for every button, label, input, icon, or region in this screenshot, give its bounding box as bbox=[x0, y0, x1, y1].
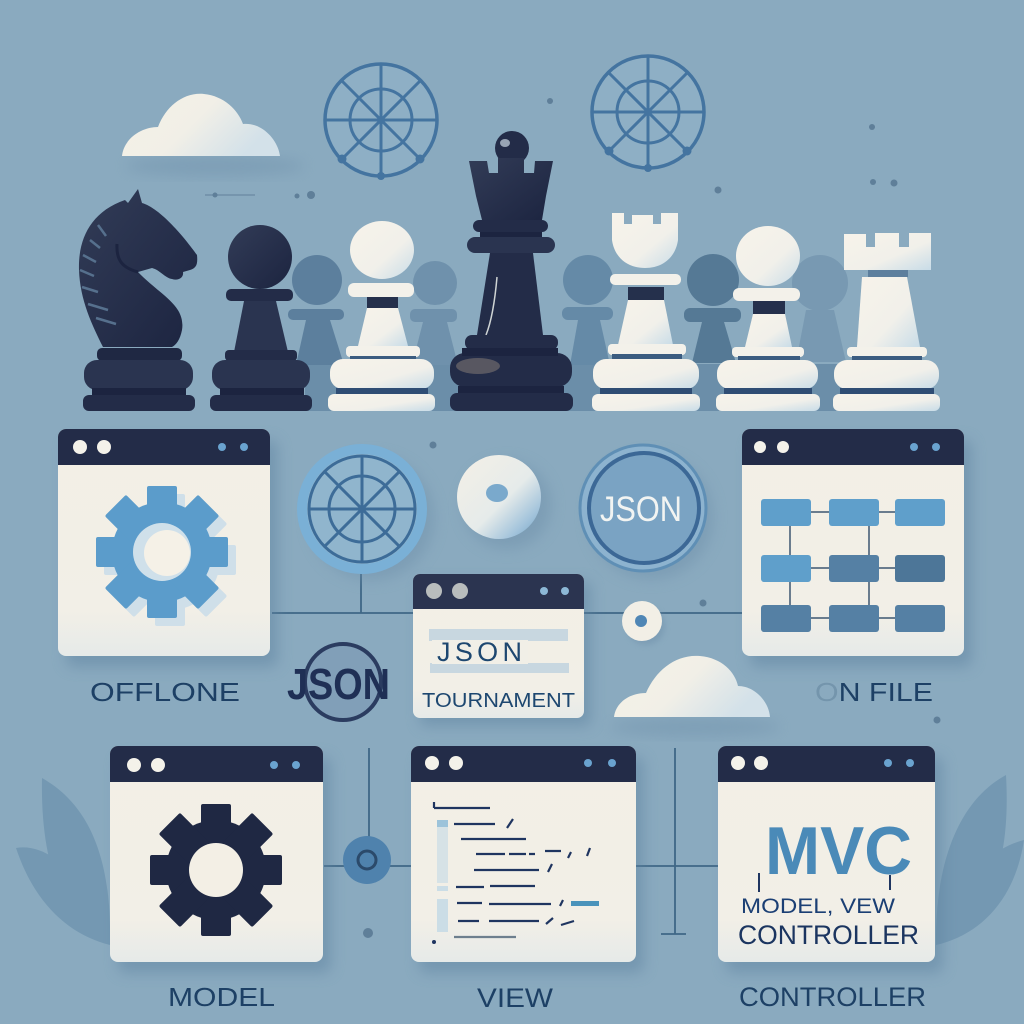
icon: wheel top left bbox=[325, 64, 437, 180]
icon: wheel top right bbox=[592, 56, 704, 172]
panel: tournament window bbox=[413, 574, 591, 726]
icon: json logo bbox=[287, 644, 390, 720]
mvc ticks bbox=[759, 873, 890, 892]
icon: cloud top left bbox=[122, 94, 305, 176]
panel: file window bbox=[742, 429, 972, 667]
diagram boxes bbox=[761, 499, 945, 632]
text: tournament: TOURNAMENT bbox=[422, 690, 575, 712]
panel: controller window bbox=[718, 746, 943, 973]
background pawn 3 bbox=[562, 255, 613, 365]
code lines bbox=[432, 802, 599, 944]
icon: blue gear bbox=[96, 486, 236, 626]
diagram connectors bbox=[790, 512, 895, 618]
white pawn left bbox=[328, 221, 435, 411]
white pawn right bbox=[716, 226, 820, 411]
code side blocks bbox=[437, 820, 448, 932]
decorative specks bbox=[205, 98, 940, 938]
black queen bbox=[450, 131, 573, 411]
icon: small node bbox=[622, 601, 665, 645]
icon: cloud middle bbox=[610, 656, 780, 736]
icon: central node bbox=[343, 836, 391, 884]
background pawn 4 bbox=[684, 254, 741, 363]
decorative leaf right bbox=[936, 775, 1024, 945]
icon: dark gear bbox=[150, 804, 282, 936]
icon: json logo: JSON bbox=[287, 660, 390, 709]
background pawn 5 bbox=[792, 255, 848, 362]
panel: view window bbox=[411, 746, 644, 973]
white rook bbox=[833, 233, 940, 411]
black pawn bbox=[210, 225, 312, 411]
panel: model window bbox=[110, 746, 331, 973]
table shadow band bbox=[305, 364, 930, 411]
text: json: JSON bbox=[437, 637, 522, 667]
black knight bbox=[79, 189, 197, 411]
white rook-pawn bbox=[592, 213, 700, 411]
icon: wheel badge bbox=[302, 449, 434, 580]
chess pieces row bbox=[79, 131, 940, 411]
text: model view: MODEL, VEW bbox=[741, 895, 895, 918]
panel: offline window bbox=[58, 429, 278, 667]
label: offlone: OFFLONE bbox=[90, 677, 240, 707]
icon: ring token bbox=[457, 455, 551, 549]
text: controller: CONTROLLER bbox=[738, 920, 919, 950]
label: view: VIEW bbox=[477, 983, 554, 1013]
decorative leaf left bbox=[16, 778, 110, 945]
background pawn 1 bbox=[288, 255, 344, 365]
connector lines bbox=[272, 574, 742, 934]
background pawn 2 bbox=[410, 261, 458, 365]
text: mvc: MVC bbox=[765, 813, 912, 889]
label: controller: CONTROLLER bbox=[739, 982, 926, 1012]
label: on file: ON FILE bbox=[815, 677, 933, 707]
icon: json badge: JSON bbox=[600, 490, 682, 529]
label: model: MODEL bbox=[168, 982, 275, 1012]
icon: json badge bbox=[580, 445, 713, 579]
